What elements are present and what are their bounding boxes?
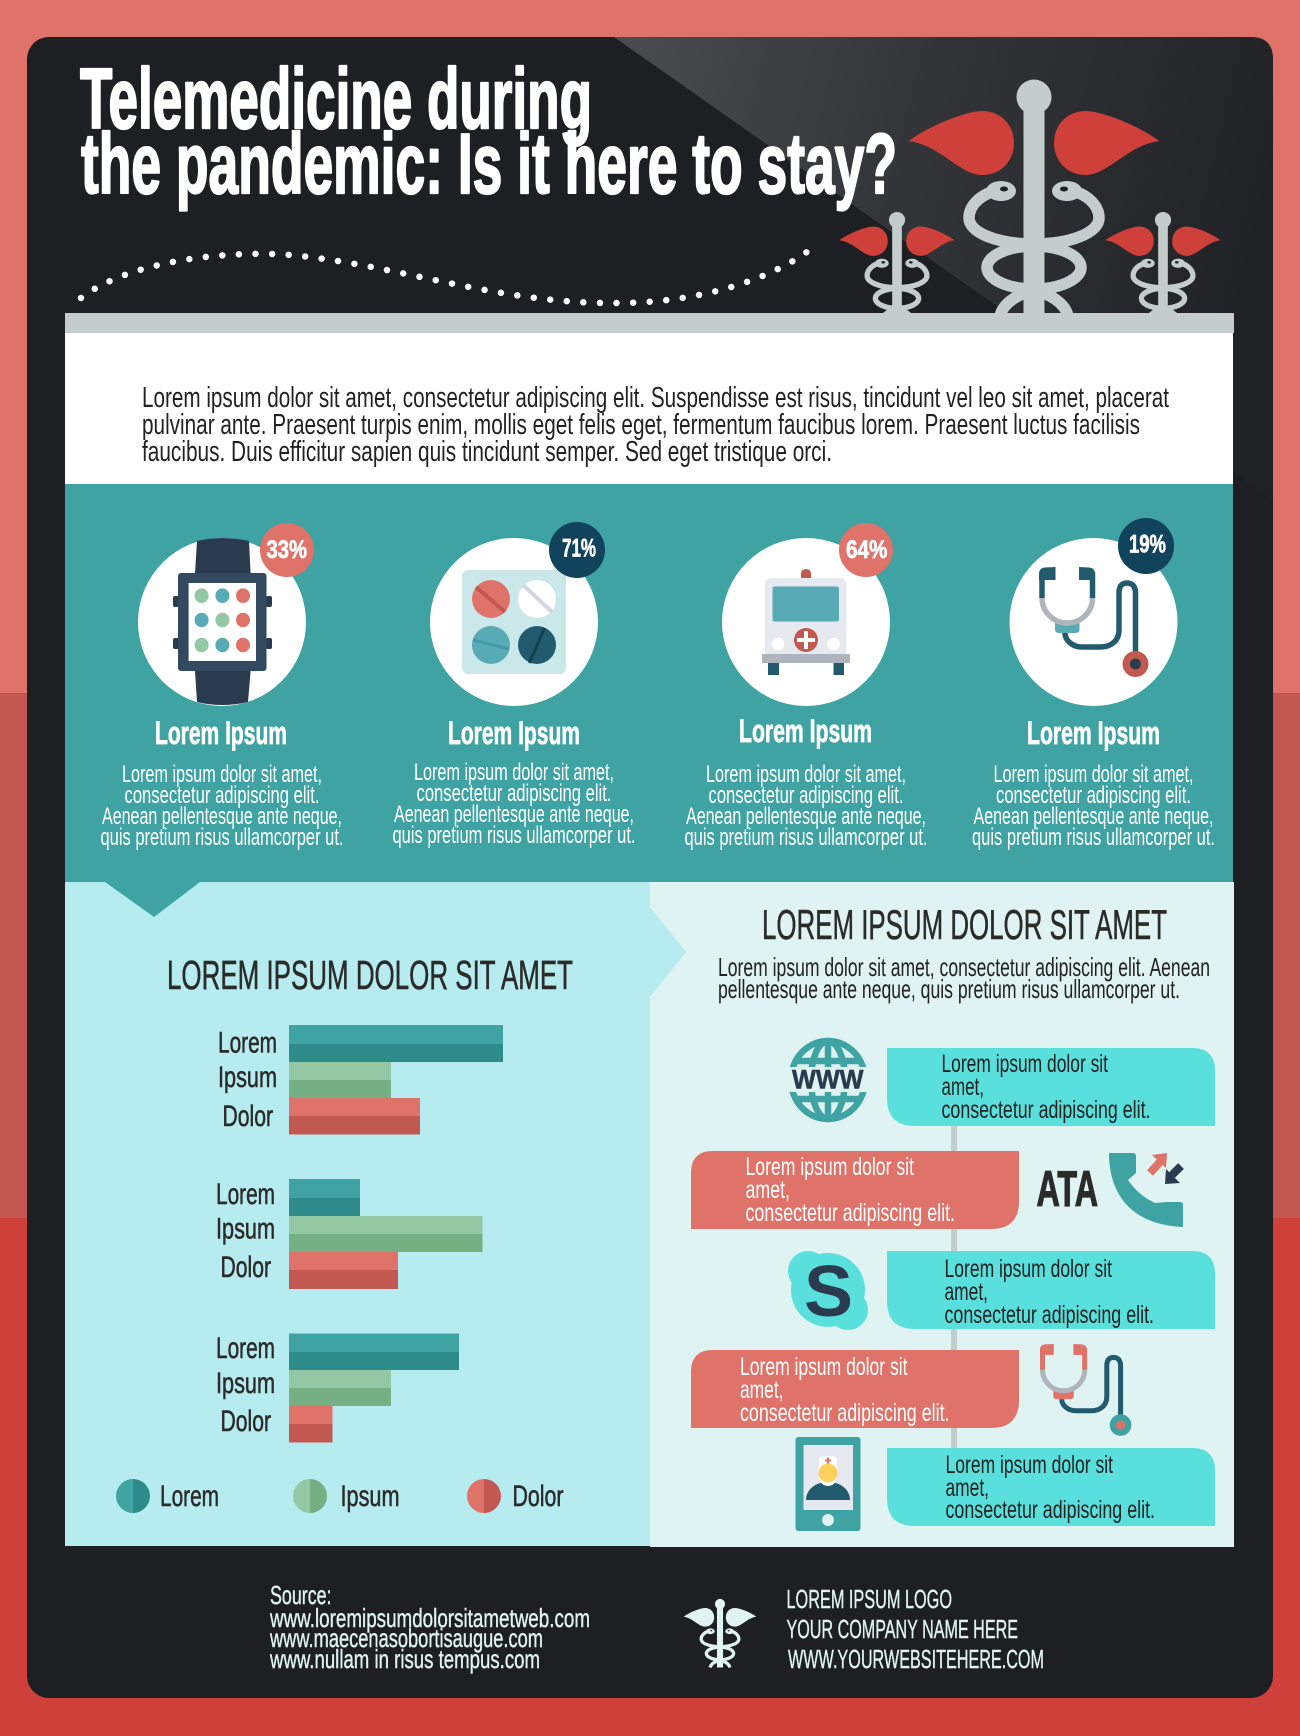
footer sources: www.maecenasobortisaugue.com [269,1623,543,1653]
badge: 19%: 19% [1129,531,1166,559]
bar group 2: Lorem [216,1178,275,1211]
body text: Lorem ipsum dolor sit amet, [994,761,1194,788]
legend item: Dolor [467,1479,564,1513]
header diagonal light beam [614,37,1273,500]
body text [392,759,636,849]
body text [972,761,1215,851]
icon: pill pack [430,538,598,706]
icon: www globe: WWW [792,1064,864,1094]
timeline connector [951,1126,957,1448]
timeline item 4 [691,1350,1019,1428]
footer sources: www.nullam in risus tempus.com [269,1644,540,1674]
body text: quis pretium risus ullamcorper ut. [392,822,636,849]
timeline item 2: Lorem ipsum dolor sit [746,1153,914,1181]
footer sources: Source: [270,1580,332,1610]
body text: Aenean pellentesque ante neque, [394,801,634,828]
intro text block [142,382,1169,468]
legend [116,1479,564,1513]
timeline item 1 [887,1048,1215,1126]
timeline item 5: amet, [946,1474,989,1502]
card: ambulance [684,523,928,851]
bar group 2: Ipsum [216,1212,275,1246]
footer sources: www.loremipsumdolorsitametweb.com [269,1603,590,1633]
bar group 1: Ipsum [218,1061,277,1094]
panel: timeline background [650,882,1234,1547]
footer company details [786,1584,1044,1674]
bar group 2 [216,1178,482,1289]
body text: consectetur adipiscing elit. [996,782,1191,809]
timeline item 3: consectetur adipiscing elit. [944,1301,1154,1329]
heading: Lorem Ipsum [739,713,872,749]
card: pills [392,522,636,849]
heading: Lorem Ipsum [1027,715,1160,751]
legend item: Dolor: Dolor [512,1480,564,1513]
timeline item 3 [887,1251,1215,1329]
body text: Aenean pellentesque ante neque, [102,803,342,830]
timeline item 4: Lorem ipsum dolor sit [740,1353,908,1381]
body text [100,761,344,851]
badge: 19% [1118,518,1174,574]
grey header bar [65,313,1234,333]
icon: www globe [786,1040,870,1120]
bar group 3: Dolor [220,1405,271,1438]
badge: 33%: 33% [266,536,307,564]
timeline item 1: amet, [942,1073,984,1101]
timeline item 5: Lorem ipsum dolor sit [946,1451,1113,1479]
body text: Aenean pellentesque ante neque, [686,803,926,830]
footer logo icon [684,1599,756,1668]
panel: bar chart background [65,882,650,1546]
timeline item 2: consectetur adipiscing elit. [746,1199,955,1227]
bar group 3 [216,1332,459,1442]
card: stethoscope [972,518,1215,851]
body text: Lorem ipsum dolor sit amet, [414,759,614,786]
bar group 1: Lorem [218,1026,277,1060]
footer sources [269,1580,590,1674]
panel: teal statistics [65,484,1233,882]
heading: Lorem Ipsum [448,715,580,751]
body text: consectetur adipiscing elit. [124,782,320,809]
timeline item 4: amet, [740,1376,784,1404]
timeline intro text [718,952,1210,1004]
timeline item 1: Lorem ipsum dolor sit [942,1050,1108,1078]
icon: telephone with arrows [1109,1153,1183,1227]
bar group 3: Ipsum [216,1367,275,1400]
bar chart [216,1025,503,1442]
body text: Lorem ipsum dolor sit amet, [122,761,322,788]
footer company details: LOREM IPSUM LOGO [786,1584,952,1614]
bar group 2: Dolor [220,1251,271,1284]
title: Telemedicine during [80,52,592,147]
body text: quis pretium risus ullamcorper ut. [100,824,344,851]
body text: quis pretium risus ullamcorper ut. [684,824,928,851]
timeline item 4: consectetur adipiscing elit. [740,1399,950,1427]
card: watch [100,523,344,851]
timeline item 1: consectetur adipiscing elit. [942,1096,1150,1124]
icon: tablet with nurse [796,1437,860,1531]
timeline item 3: amet, [944,1278,988,1306]
footer company details: WWW.YOURWEBSITEHERE.COM [788,1644,1044,1674]
icon: large caduceus [909,80,1159,316]
bar group 3: Lorem [216,1332,275,1365]
icon: skype: S [804,1252,853,1332]
icon: smart watch [138,538,306,706]
body text [684,761,928,851]
icon: small caduceus left [840,212,954,321]
teal pointer [105,882,200,917]
dotted wave line [81,249,811,303]
bar group 1: Dolor [222,1100,273,1133]
badge: 33% [260,523,314,577]
ATA label: ATA [1036,1161,1098,1217]
legend item: Lorem [116,1479,219,1513]
icon: small caduceus right [1106,212,1220,321]
legend item: Ipsum [293,1479,400,1513]
badge: 71%: 71% [562,535,596,563]
arrow into right panel [650,907,686,997]
timeline item 2 [691,1151,1019,1229]
body text: consectetur adipiscing elit. [416,780,612,807]
legend item: Lorem: Lorem [160,1480,219,1513]
icon: small stethoscope [1040,1344,1131,1436]
icon: ambulance [722,538,890,706]
badge: 64% [839,523,893,577]
panel: intro [65,333,1233,484]
body text: consectetur adipiscing elit. [708,782,904,809]
intro text block: faucibus. Duis efficitur sapien quis tincidunt semper. Sed eget tristique orci. [142,436,832,468]
heading: Lorem Ipsum [155,715,287,751]
timeline item 5: consectetur adipiscing elit. [946,1496,1155,1524]
icon: stethoscope [1010,538,1178,706]
legend item: Ipsum: Ipsum [340,1480,400,1513]
icon: skype [788,1251,868,1332]
timeline item 5 [887,1448,1215,1526]
timeline item 3: Lorem ipsum dolor sit [944,1255,1112,1283]
footer company details: YOUR COMPANY NAME HERE [786,1614,1018,1644]
heading: bar chart: LOREM IPSUM DOLOR SIT AMET [167,952,573,998]
bar group 1 [218,1025,503,1134]
badge: 71% [549,522,605,578]
badge: 64%: 64% [846,536,888,564]
body text: Lorem ipsum dolor sit amet, [706,761,906,788]
title [80,52,897,212]
timeline item 2: amet, [746,1176,790,1204]
